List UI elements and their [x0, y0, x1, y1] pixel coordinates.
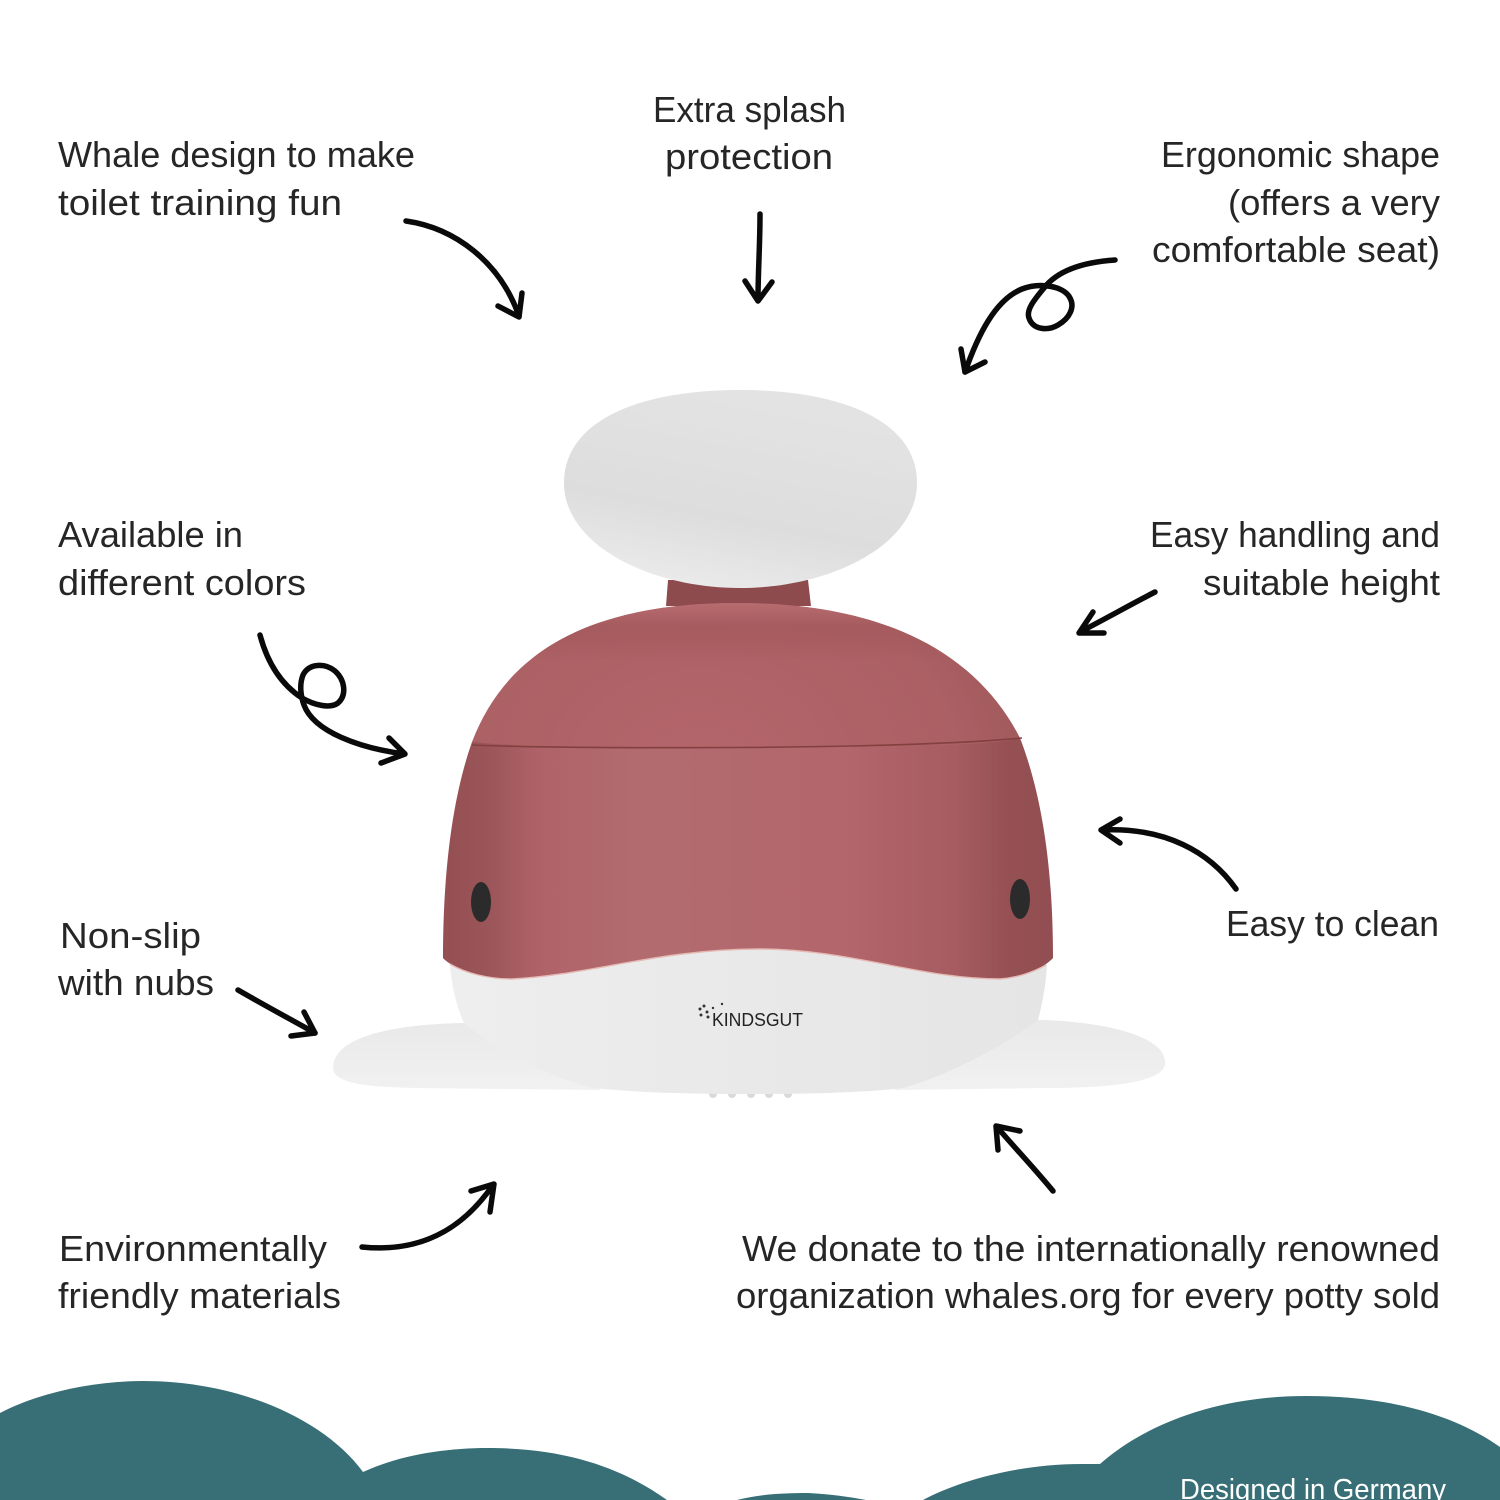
text: donation [736, 1228, 1440, 1316]
eye right [1010, 879, 1030, 919]
text: whale design: Whale design to make [58, 134, 415, 175]
arrow: easy handling [1079, 592, 1155, 633]
lid [470, 600, 1030, 748]
text: extra splash protection: Extra splash [653, 89, 846, 130]
logo: KINDSGUT [712, 1010, 803, 1030]
stem [666, 580, 811, 606]
text: easy handling: Easy handling and [1150, 514, 1440, 555]
lid seam [472, 738, 1022, 748]
text: easy handling [1150, 514, 1440, 603]
text: environmentally friendly: friendly materials [58, 1275, 341, 1316]
white belly [450, 930, 1047, 1094]
text: available colors: Available in [58, 514, 243, 555]
text: ergonomic shape [1152, 134, 1441, 270]
arrow: whale design [406, 221, 522, 317]
right flipper [895, 1020, 1165, 1090]
text: non-slip: Non-slip [60, 915, 201, 956]
text: ergonomic shape: Ergonomic shape [1161, 134, 1440, 175]
footer: teal waves [0, 1381, 1500, 1500]
eye left [471, 882, 491, 922]
logo [698, 1003, 803, 1030]
text: extra splash protection [653, 89, 846, 177]
text: available colors [58, 514, 306, 603]
text: ergonomic shape: (offers a very [1228, 182, 1441, 223]
belly highlight [450, 949, 1046, 979]
tail fin [564, 390, 917, 588]
nubs [709, 1090, 792, 1098]
text: whale design: toilet training fun [58, 182, 342, 223]
text: non-slip [57, 915, 214, 1003]
arrow: extra splash [745, 214, 772, 301]
text: easy to clean: Easy to clean [1226, 903, 1439, 944]
text: ergonomic shape: comfortable seat) [1152, 229, 1440, 270]
text: available colors: different colors [58, 562, 306, 603]
arrow: non-slip [238, 990, 315, 1036]
text: environmentally friendly: Environmentally [59, 1228, 328, 1269]
text: environmentally friendly [58, 1228, 341, 1316]
arrow: ergonomic [961, 260, 1115, 372]
arrow: available colors [260, 635, 405, 763]
red body [443, 738, 1053, 979]
text: donation: organization whales.org for every potty sold [736, 1275, 1440, 1316]
arrow: easy to clean [1101, 819, 1236, 889]
text: donation: We donate to the internationally renowned [742, 1228, 1440, 1269]
text: easy handling: suitable height [1203, 562, 1440, 603]
arrow: environmentally friendly [362, 1184, 494, 1248]
text: non-slip: with nubs [57, 962, 214, 1003]
text: whale design [58, 134, 415, 223]
illustration: whale potty [333, 390, 1165, 1098]
text: extra splash protection: protection [665, 136, 833, 177]
arrow: donation [996, 1126, 1053, 1191]
left flipper [333, 1023, 600, 1090]
